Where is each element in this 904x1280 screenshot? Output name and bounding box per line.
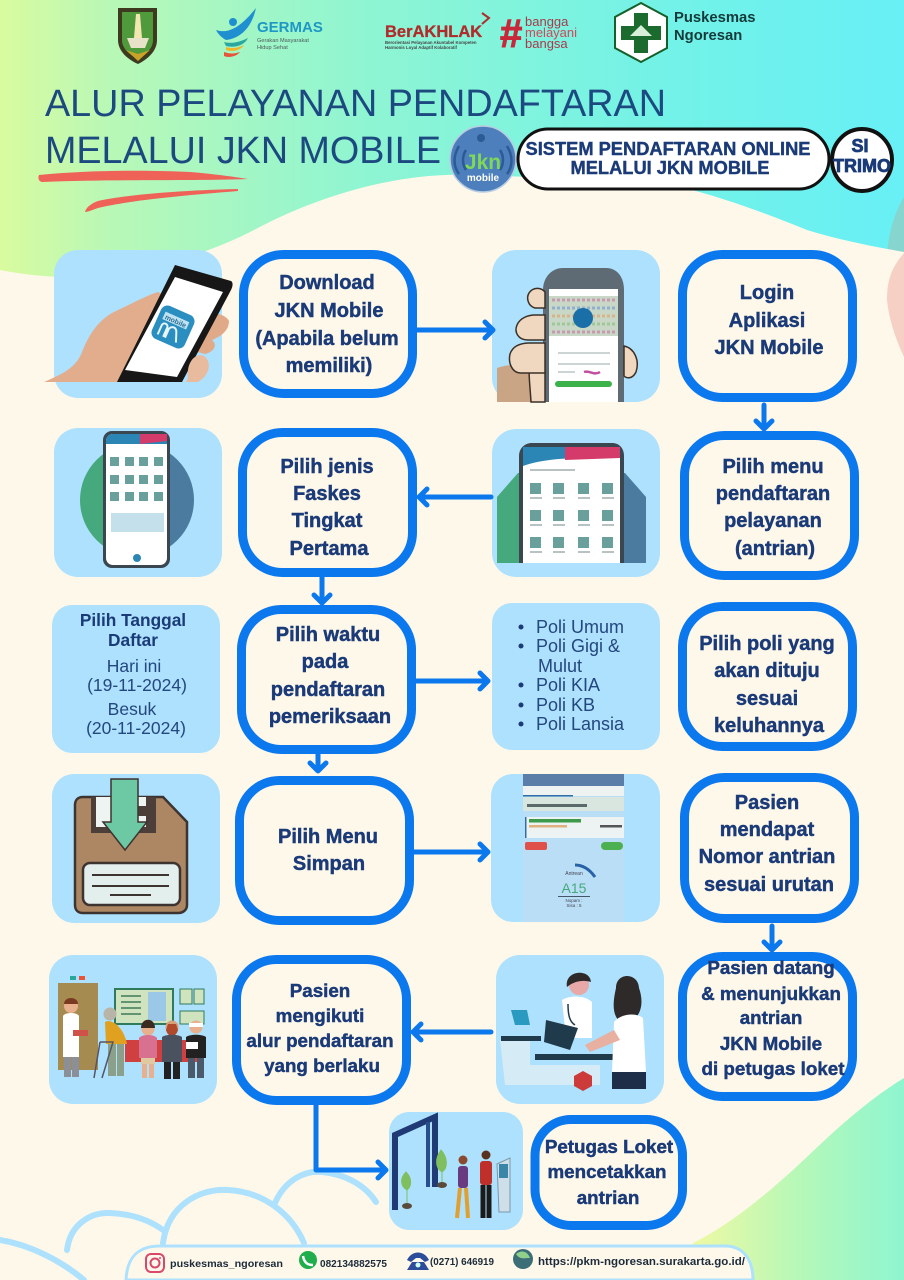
panel: daftar poli: Poli KB [536,695,595,715]
box: pasien datang: di petugas loket [702,1058,845,1079]
panel: gate and kiosk [389,1112,523,1230]
panel: pilih tanggal: (20-11-2024) [86,718,186,738]
panel: login phone [492,250,660,402]
panel: antrian screenshot: Nopam : [565,898,583,903]
box: pasien datang: JKN Mobile [720,1033,822,1054]
box: mengikuti alur [236,960,406,1100]
logo: BerAKHLAK [385,13,489,50]
box: pasien datang: Pasien datang [707,957,835,978]
panel: daftar poli: Poli Lansia [536,714,625,734]
box: pasien datang [682,956,852,1096]
box: nomor antrian: sesuai urutan [704,874,834,896]
panel: daftar poli: Poli KIA [536,675,600,695]
logo: bangga melayani bangsa [500,12,577,56]
panel: daftar poli: Mulut [538,656,582,676]
box: pilih menu simpan: Pilih Menu [278,826,378,848]
text: telephone number: (0271) 646919 [430,1256,494,1268]
badge: sistem pendaftaran online: SISTEM PENDAFTARAN ONLINE [526,139,810,159]
text: instagram handle: puskesmas_ngoresan [170,1258,283,1270]
box: pilih menu: Pilih menu [722,456,824,478]
title: MELALUI JKN MOBILE [45,130,441,172]
box: pilih poli: keluhannya [714,715,825,737]
badge: sistem pendaftaran online [518,129,829,189]
box: pilih menu: pelayanan [724,510,822,532]
panel: hand holding phone: mobile [164,314,187,330]
box: mengikuti alur: alur pendaftaran [246,1030,394,1051]
icon: globe [513,1249,533,1269]
arrow: waktu to simpan [310,754,326,771]
panel: daftar poli: Poli Gigi & [536,636,620,656]
logo: Puskesmas Ngoresan: Ngoresan [674,28,742,44]
box: petugas loket [535,1120,682,1226]
panel: waiting room [49,955,217,1104]
logo: JKN mobile: mobile [467,173,500,184]
logo: Puskesmas Ngoresan [615,3,755,62]
badge: sistem pendaftaran online: MELALUI JKN MOBILE [570,158,770,178]
box: pilih waktu: pendaftaran [271,679,385,701]
panel: antrian screenshot: A15 [562,880,587,896]
title: ALUR PELAYANAN PENDAFTARAN [45,83,666,125]
box: mengikuti alur: mengikuti [276,1005,364,1026]
title underline strokes [38,171,248,212]
box: pilih poli: akan dituju [714,660,820,682]
box: download: JKN Mobile [275,300,383,322]
box: pilih menu simpan [240,780,410,920]
arrow: datang to mengikuti [413,1024,491,1040]
badge: si trimo: TRIMO [833,156,891,176]
box: pilih menu [684,436,854,576]
panel: faskes phone [54,428,222,577]
box: pilih menu: (antrian) [735,538,815,560]
panel: save icon [52,774,220,923]
box: pilih waktu: pada [302,651,349,673]
box: pasien datang: & menunjukkan [701,983,841,1004]
box: pilih menu: pendaftaran [716,483,830,505]
box: pilih jenis faskes [242,432,412,572]
badge: si trimo: SI [851,136,869,156]
arrow: login to menu [756,405,772,429]
panel: antrian screenshot [491,774,660,922]
logo: GERMAS: GERMAS [257,19,323,36]
box: petugas loket: antrian [577,1187,639,1208]
box: mengikuti alur: yang berlaku [264,1055,380,1076]
logo: GERMAS: Hidup Sehat [257,45,288,51]
decorative clouds [0,1172,376,1280]
box: download: memiliki) [286,355,372,377]
box: nomor antrian: Pasien [735,792,799,814]
panel: pilih tanggal: (19-11-2024) [87,675,187,695]
panel: pilih tanggal [52,605,220,753]
panel: doctor at desk [496,955,664,1104]
box: login: Login [740,282,794,304]
box: download [244,254,412,394]
box: pilih poli: sesuai [736,688,798,710]
box: login: Aplikasi [729,310,805,332]
box: pilih poli: Pilih poli yang [699,633,835,655]
arrow: elbow to loket [316,1105,386,1178]
box: nomor antrian [684,778,854,918]
box: pilih waktu: pemeriksaan [269,706,391,728]
panel: pilih tanggal: Pilih Tanggal [80,610,186,630]
arrow: waktu to poli list [416,673,488,689]
box: pilih jenis faskes: Pertama [290,538,369,560]
panel: hand holding phone [44,250,233,398]
logo: bangga melayani bangsa: # [500,12,522,56]
badge: si trimo [832,129,892,191]
logo: bangga melayani bangsa: melayani [525,25,577,40]
panel: daftar poli [492,603,660,750]
icon: instagram [146,1254,164,1272]
box: pilih jenis faskes: Faskes [293,483,361,505]
logo: bangga melayani bangsa: bangga [525,14,569,29]
box: pasien datang: antrian [740,1007,802,1028]
box: download: (Apabila belum [255,328,399,350]
logo: city crest [118,8,157,64]
footer bar [126,1246,753,1280]
box: download: Download [279,272,375,294]
arrow: menu to faskes [419,489,491,505]
box: pilih waktu [242,610,412,750]
logo: BerAKHLAK: Berorientasi Pelayanan Akuntabel Kompeten [385,40,477,45]
text: whatsapp number: 082134882575 [320,1258,387,1270]
box: pilih jenis faskes: Pilih jenis [280,456,374,478]
logo: Puskesmas Ngoresan: Puskesmas [674,10,755,26]
title [45,83,666,172]
box: pilih jenis faskes: Tingkat [292,510,363,532]
box: pilih menu simpan: Simpan [293,853,365,875]
panel: menu phone [492,429,660,577]
logo: BerAKHLAK: Harmonis Loyal Adaptif Kolaboratif [385,45,458,50]
panel: pilih tanggal: Hari ini [107,656,161,676]
logo: bangga melayani bangsa: bangsa [525,36,568,51]
box: login: JKN Mobile [715,337,823,359]
arrow: simpan to antrian [414,844,488,860]
box: nomor antrian: mendapat [720,819,815,841]
icon: whatsapp [299,1251,317,1269]
text: website: https://pkm-ngoresan.surakarta.go.id/ [538,1256,745,1268]
icon: telephone [407,1252,429,1270]
box: nomor antrian: Nomor antrian [699,846,835,868]
logo: GERMAS [216,8,323,57]
arrow: download to login [417,322,493,338]
box: petugas loket: mencetakkan [547,1161,667,1182]
logo: GERMAS: Gerakan Masyarakat [257,38,309,44]
box: petugas loket: Petugas Loket [545,1136,674,1157]
panel: daftar poli: Poli Umum [536,617,624,637]
box: mengikuti alur: Pasien [290,980,350,1001]
arrow: antrian to datang [764,926,780,950]
panel: pilih tanggal: Besuk [108,699,157,719]
logo: JKN mobile: Jkn [465,151,501,174]
panel: antrian screenshot: Antrean [565,871,583,877]
box: pilih waktu: Pilih waktu [276,624,380,646]
box: pilih poli [682,606,852,746]
logo: JKN mobile [450,126,516,192]
arrow: faskes to waktu [314,577,330,603]
logo: BerAKHLAK: BerAKHLAK [385,23,482,41]
panel: antrian screenshot: Sisa : 5 [566,903,582,908]
panel: pilih tanggal: Daftar [108,630,158,650]
box: login [682,254,852,398]
